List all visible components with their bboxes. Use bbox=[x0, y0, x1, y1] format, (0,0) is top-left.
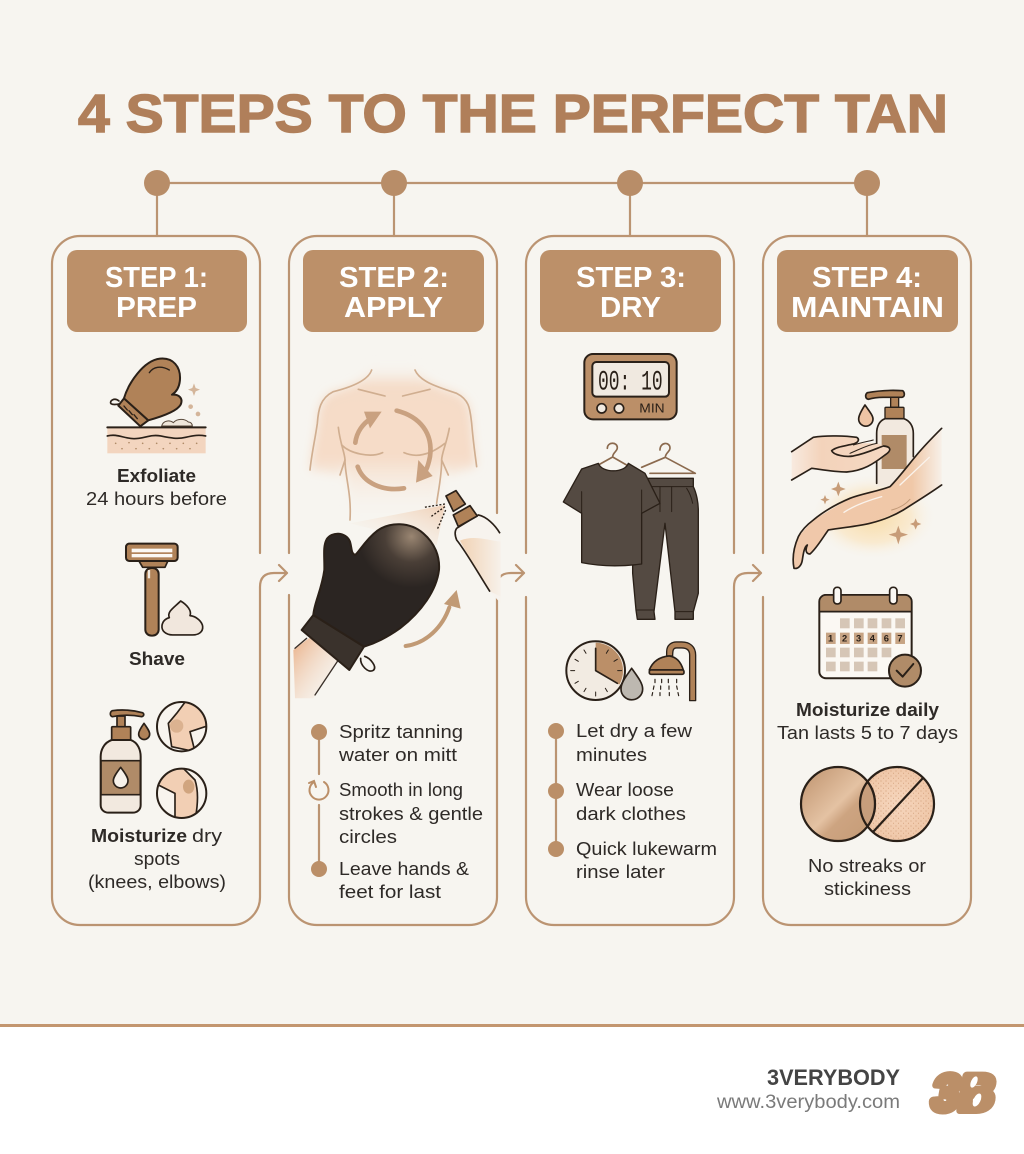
bullet list: dry: Quick lukewarm bbox=[576, 838, 717, 859]
title: 4 STEPS TO THE PERFECT TAN bbox=[78, 84, 948, 144]
text: moisturize daily: Moisturize daily bbox=[796, 699, 940, 720]
text: exfoliate: 24 hours before bbox=[86, 488, 227, 509]
icon: curved arrow bbox=[406, 590, 461, 646]
icon: digital timer: MIN bbox=[639, 402, 665, 416]
icon: calendar with check bbox=[819, 587, 921, 687]
icon: exfoliating mitt on skin bbox=[107, 359, 206, 453]
heading: step 1 prep: PREP bbox=[116, 292, 197, 324]
text: shave: Shave bbox=[129, 648, 185, 669]
icon: calendar with check: 1 bbox=[828, 634, 833, 644]
bullet list: apply: Leave hands & bbox=[339, 858, 470, 879]
panel outline with arrow to step 2 bbox=[52, 236, 287, 925]
heading: step 1 prep: STEP 1: bbox=[105, 262, 208, 294]
panel: step 1 prep bbox=[52, 236, 287, 925]
icon: tanning mitt on hand bbox=[293, 524, 439, 698]
heading: step 2 apply bbox=[303, 250, 484, 332]
bullet list: dry: dark clothes bbox=[576, 803, 686, 824]
icon: calendar with check: 4 bbox=[870, 634, 876, 644]
heading: step 2 apply: STEP 2: bbox=[339, 262, 449, 294]
panel outline with arrow to step 3 bbox=[289, 236, 524, 925]
panel: step 2 apply bbox=[289, 236, 524, 925]
bullet list: apply: strokes & gentle bbox=[339, 803, 483, 824]
heading: step 4 maintain: STEP 4: bbox=[812, 262, 922, 294]
icon: smooth versus streaky skin circles bbox=[801, 767, 934, 841]
icon: digital timer bbox=[584, 354, 677, 419]
text: moisturize daily: Tan lasts 5 to 7 days bbox=[777, 722, 958, 743]
panel: step 4 maintain bbox=[763, 236, 971, 925]
text: moisturize dry spots: dry bbox=[192, 825, 223, 846]
icon: calendar with check: 3 bbox=[856, 634, 861, 644]
icon: torso with circular arrows bbox=[310, 363, 477, 520]
panel outline with arrow to step 4 bbox=[526, 236, 761, 925]
text: no streaks bbox=[808, 855, 926, 899]
bullet list: apply: Smooth in long bbox=[339, 779, 463, 800]
heading: step 3 dry: DRY bbox=[600, 292, 661, 324]
footer brand name: 3VERYBODY bbox=[767, 1065, 900, 1090]
panel: step 3 dry bbox=[526, 236, 761, 925]
bullet list: apply: Spritz tanning bbox=[339, 721, 463, 742]
text: no streaks: stickiness bbox=[824, 878, 911, 899]
icon: loose dark clothes on hangers bbox=[563, 443, 698, 619]
text: moisturize dry spots: Moisturize bbox=[91, 825, 187, 846]
heading: step 3 dry: STEP 3: bbox=[576, 262, 686, 294]
heading: step 1 prep bbox=[67, 250, 247, 332]
icon: lotion bottle with knee and elbow bbox=[101, 700, 210, 820]
heading: step 4 maintain bbox=[777, 250, 958, 332]
text: moisturize dry spots: (knees, elbows) bbox=[88, 871, 226, 892]
icon: calendar with check: 2 bbox=[842, 634, 847, 644]
icon: clock, water drop and shower bbox=[566, 641, 696, 701]
icon: spray bottle bbox=[350, 491, 501, 603]
text: exfoliate bbox=[86, 465, 227, 509]
icon: circular bullet bbox=[309, 781, 328, 800]
bullet list: apply: feet for last bbox=[339, 881, 441, 902]
text: moisturize dry spots bbox=[88, 825, 226, 892]
bullet list: apply: water on mitt bbox=[338, 744, 457, 765]
text: moisturize dry spots: spots bbox=[134, 848, 180, 869]
heading: step 2 apply: APPLY bbox=[344, 292, 443, 324]
footer band bbox=[0, 1024, 1024, 1154]
bullet list: apply bbox=[309, 721, 483, 902]
icon: calendar with check: 6 bbox=[884, 634, 889, 644]
timeline connecting the four steps bbox=[144, 170, 880, 236]
bullet list: dry: rinse later bbox=[576, 861, 665, 882]
icon: razor and shaving foam bbox=[126, 544, 203, 636]
logo: 3B: 3B bbox=[928, 1064, 1000, 1121]
heading: step 3 dry bbox=[540, 250, 721, 332]
panel outline bbox=[763, 236, 971, 925]
bullet list: dry: Let dry a few bbox=[576, 720, 693, 741]
text: exfoliate: Exfoliate bbox=[117, 465, 196, 486]
bullet list: apply: circles bbox=[339, 826, 397, 847]
icon: calendar with check: 7 bbox=[897, 634, 903, 644]
bullet list: dry bbox=[548, 720, 717, 882]
text: moisturize daily bbox=[777, 699, 958, 743]
bullet list: dry: Wear loose bbox=[576, 779, 674, 800]
bullet list: dry: minutes bbox=[576, 744, 647, 765]
footer website: www.3verybody.com bbox=[716, 1092, 900, 1113]
icon: lotion into hand and arm bbox=[792, 390, 942, 568]
heading: step 4 maintain: MAINTAIN bbox=[791, 292, 944, 324]
icon: digital timer: 00: 10 bbox=[598, 367, 663, 398]
text: no streaks: No streaks or bbox=[808, 855, 926, 876]
